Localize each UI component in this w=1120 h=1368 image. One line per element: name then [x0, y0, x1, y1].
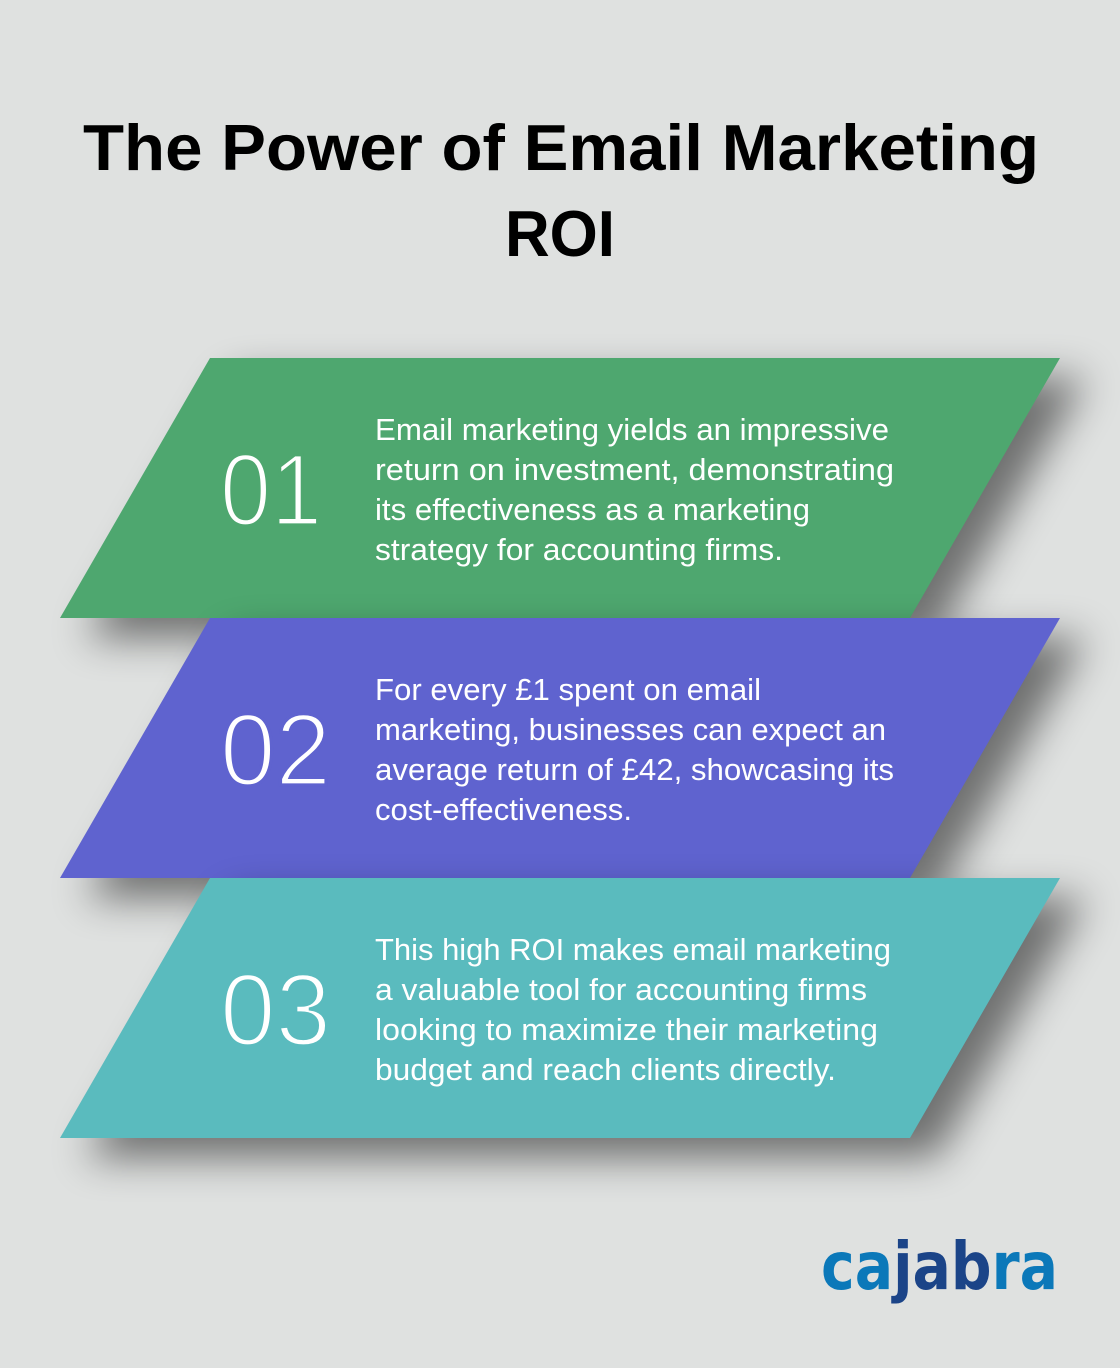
title — [83, 111, 1039, 270]
number 01: 01 — [220, 433, 322, 547]
logo: cajabra: cajabra — [821, 1228, 1058, 1305]
text 03: a valuable tool for accounting firms — [375, 972, 867, 1007]
number 03: 03 — [220, 953, 331, 1067]
text 01: Email marketing yields an impressive — [375, 412, 889, 447]
text 01: return on investment, demonstrating — [375, 452, 894, 487]
text 02: average return of £42, showcasing its — [375, 752, 894, 787]
text 03 — [375, 932, 891, 1087]
panel 03: teal — [60, 878, 1086, 1158]
panel 02: purple — [60, 618, 1086, 898]
title: ROI — [505, 197, 615, 270]
text 03: This high ROI makes email marketing — [375, 932, 891, 967]
text 01 — [375, 412, 894, 567]
text 02 — [375, 672, 894, 827]
text 01: strategy for accounting firms. — [375, 532, 783, 567]
text 01: its effectiveness as a marketing — [375, 492, 810, 527]
text 02: cost-effectiveness. — [375, 792, 632, 827]
text 03: looking to maximize their marketing — [375, 1012, 878, 1047]
title: The Power of Email Marketing — [83, 111, 1039, 184]
text 02: marketing, businesses can expect an — [375, 712, 886, 747]
panel 01: green — [60, 358, 1086, 638]
text 03: budget and reach clients directly. — [375, 1052, 836, 1087]
text 02: For every £1 spent on email — [375, 672, 761, 707]
number 02: 02 — [220, 693, 331, 807]
